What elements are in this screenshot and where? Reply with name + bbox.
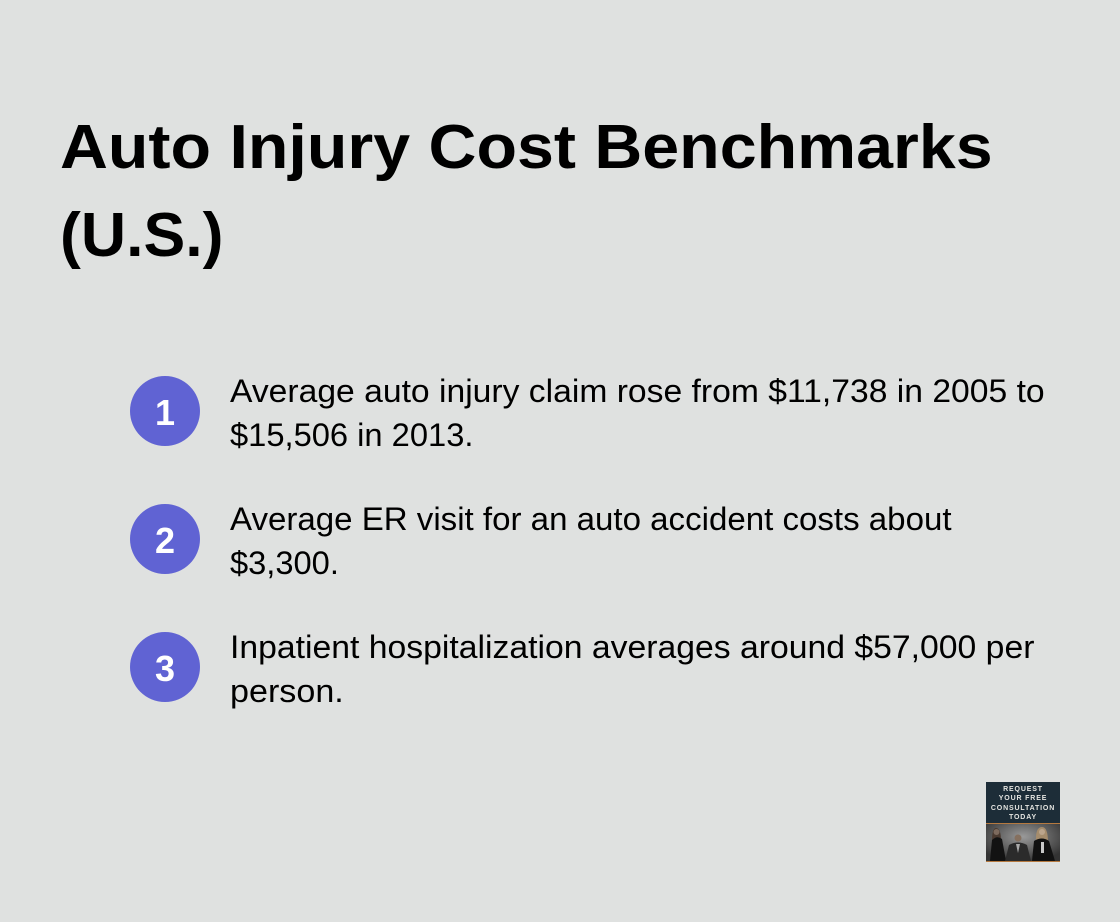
text 1: $15,506 in 2013. bbox=[230, 417, 473, 453]
ad text: TODAY bbox=[1009, 814, 1037, 821]
number badge 3 bbox=[130, 632, 200, 702]
text 2: $3,300. bbox=[230, 545, 339, 581]
number badge 1 bbox=[130, 376, 200, 446]
title: Auto Injury Cost Benchmarks bbox=[60, 113, 993, 182]
number badge 2: 2 bbox=[155, 520, 175, 561]
text 3: person. bbox=[230, 673, 344, 709]
title bbox=[60, 113, 993, 270]
title: (U.S.) bbox=[60, 201, 223, 270]
ad photo of three people bbox=[986, 823, 1060, 862]
text 2: Average ER visit for an auto accident costs about bbox=[230, 501, 952, 537]
number badge 3: 3 bbox=[155, 648, 175, 689]
ad text: YOUR FREE bbox=[999, 795, 1047, 802]
list item 2 bbox=[130, 501, 952, 581]
number badge 2 bbox=[130, 504, 200, 574]
text 2 bbox=[230, 501, 952, 581]
list item 3 bbox=[130, 629, 1034, 709]
consultation ad thumbnail bbox=[986, 782, 1060, 862]
number badge 1: 1 bbox=[155, 392, 175, 433]
list item 1 bbox=[130, 373, 1045, 453]
ad text bbox=[991, 786, 1055, 821]
text 1: Average auto injury claim rose from $11,738 in 2005 to bbox=[230, 373, 1045, 409]
text 3 bbox=[230, 629, 1034, 709]
ad text: REQUEST bbox=[1003, 786, 1043, 793]
text 1 bbox=[230, 373, 1045, 453]
ad text: CONSULTATION bbox=[991, 805, 1055, 812]
text 3: Inpatient hospitalization averages around $57,000 per bbox=[230, 629, 1034, 665]
